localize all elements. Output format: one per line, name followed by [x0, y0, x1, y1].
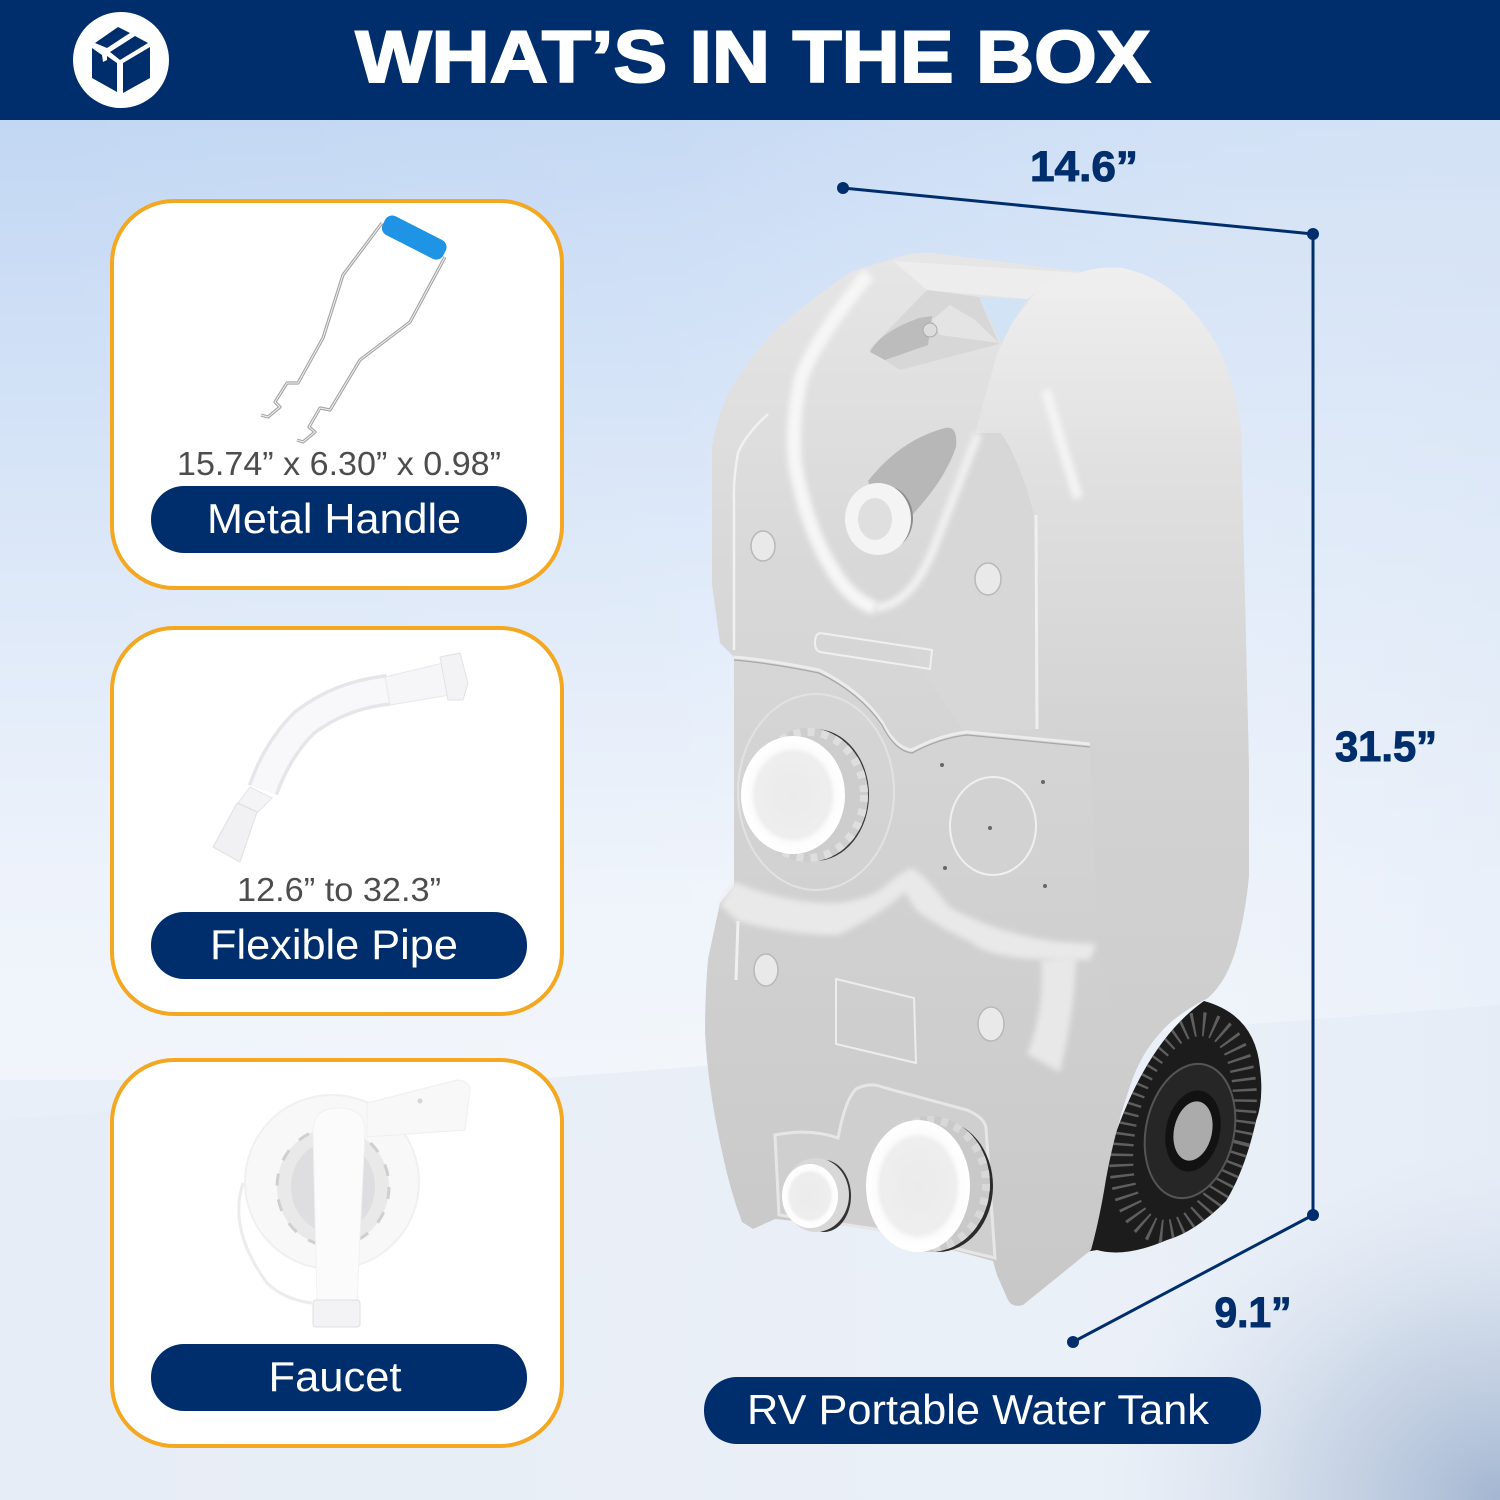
dimensions: flexible pipe: 12.6” to 32.3” — [237, 871, 441, 908]
seam band — [720, 868, 1096, 960]
label: metal handle: Metal Handle — [207, 495, 461, 542]
cap: bottom large — [866, 1116, 993, 1252]
dimensions: metal handle: 15.74” x 6.30” x 0.98” — [177, 445, 501, 482]
label: flexible pipe — [151, 912, 527, 979]
icon: flexible pipe — [213, 653, 468, 862]
bottom recess — [775, 1085, 995, 1258]
round panel — [950, 777, 1036, 875]
label plate — [836, 979, 916, 1063]
handle bar — [893, 261, 1082, 299]
label: flexible pipe: Flexible Pipe — [210, 921, 458, 968]
dimension: height: 31.5” — [1335, 723, 1437, 771]
icon: metal handle — [261, 213, 449, 442]
label: water tank: RV Portable Water Tank — [747, 1386, 1210, 1433]
panel seam lines — [734, 414, 768, 650]
dimension: height — [1307, 234, 1437, 1221]
lobe highlight — [1046, 390, 1078, 498]
corner highlight — [1027, 955, 1076, 1072]
title: WHAT’S IN THE BOX — [356, 17, 1151, 98]
cap: top small — [845, 483, 913, 555]
dimension: width: 14.6” — [1030, 143, 1138, 191]
label slot — [815, 633, 932, 669]
header band — [0, 0, 1500, 120]
label: faucet — [151, 1344, 527, 1411]
panel rivets — [940, 763, 1047, 888]
panel: flexible pipe — [112, 628, 562, 1014]
recess highlight — [794, 274, 875, 608]
handle opening — [979, 297, 1027, 343]
cap ring — [738, 694, 894, 890]
icon: box — [73, 12, 169, 108]
dimension: depth: 9.1” — [1214, 1289, 1292, 1337]
screw recesses — [751, 531, 1004, 1041]
dimension: width — [837, 143, 1319, 240]
panel: metal handle — [112, 201, 562, 588]
label: water tank — [704, 1377, 1261, 1444]
hand slot — [870, 316, 932, 360]
dimension: depth — [1067, 1215, 1313, 1348]
cap: middle large — [741, 728, 869, 862]
panel: faucet — [112, 1060, 562, 1446]
label: metal handle — [151, 486, 527, 553]
inlet recess — [868, 428, 956, 515]
label: faucet: Faucet — [268, 1353, 402, 1400]
lobe front strip — [900, 433, 1038, 732]
wheel — [1085, 1001, 1265, 1252]
tank body — [705, 253, 1249, 1306]
water tank — [705, 253, 1265, 1306]
cap: bottom small — [782, 1158, 851, 1232]
icon: faucet — [239, 1080, 470, 1327]
handle hinge — [923, 323, 937, 337]
side lobe — [975, 268, 1249, 1086]
